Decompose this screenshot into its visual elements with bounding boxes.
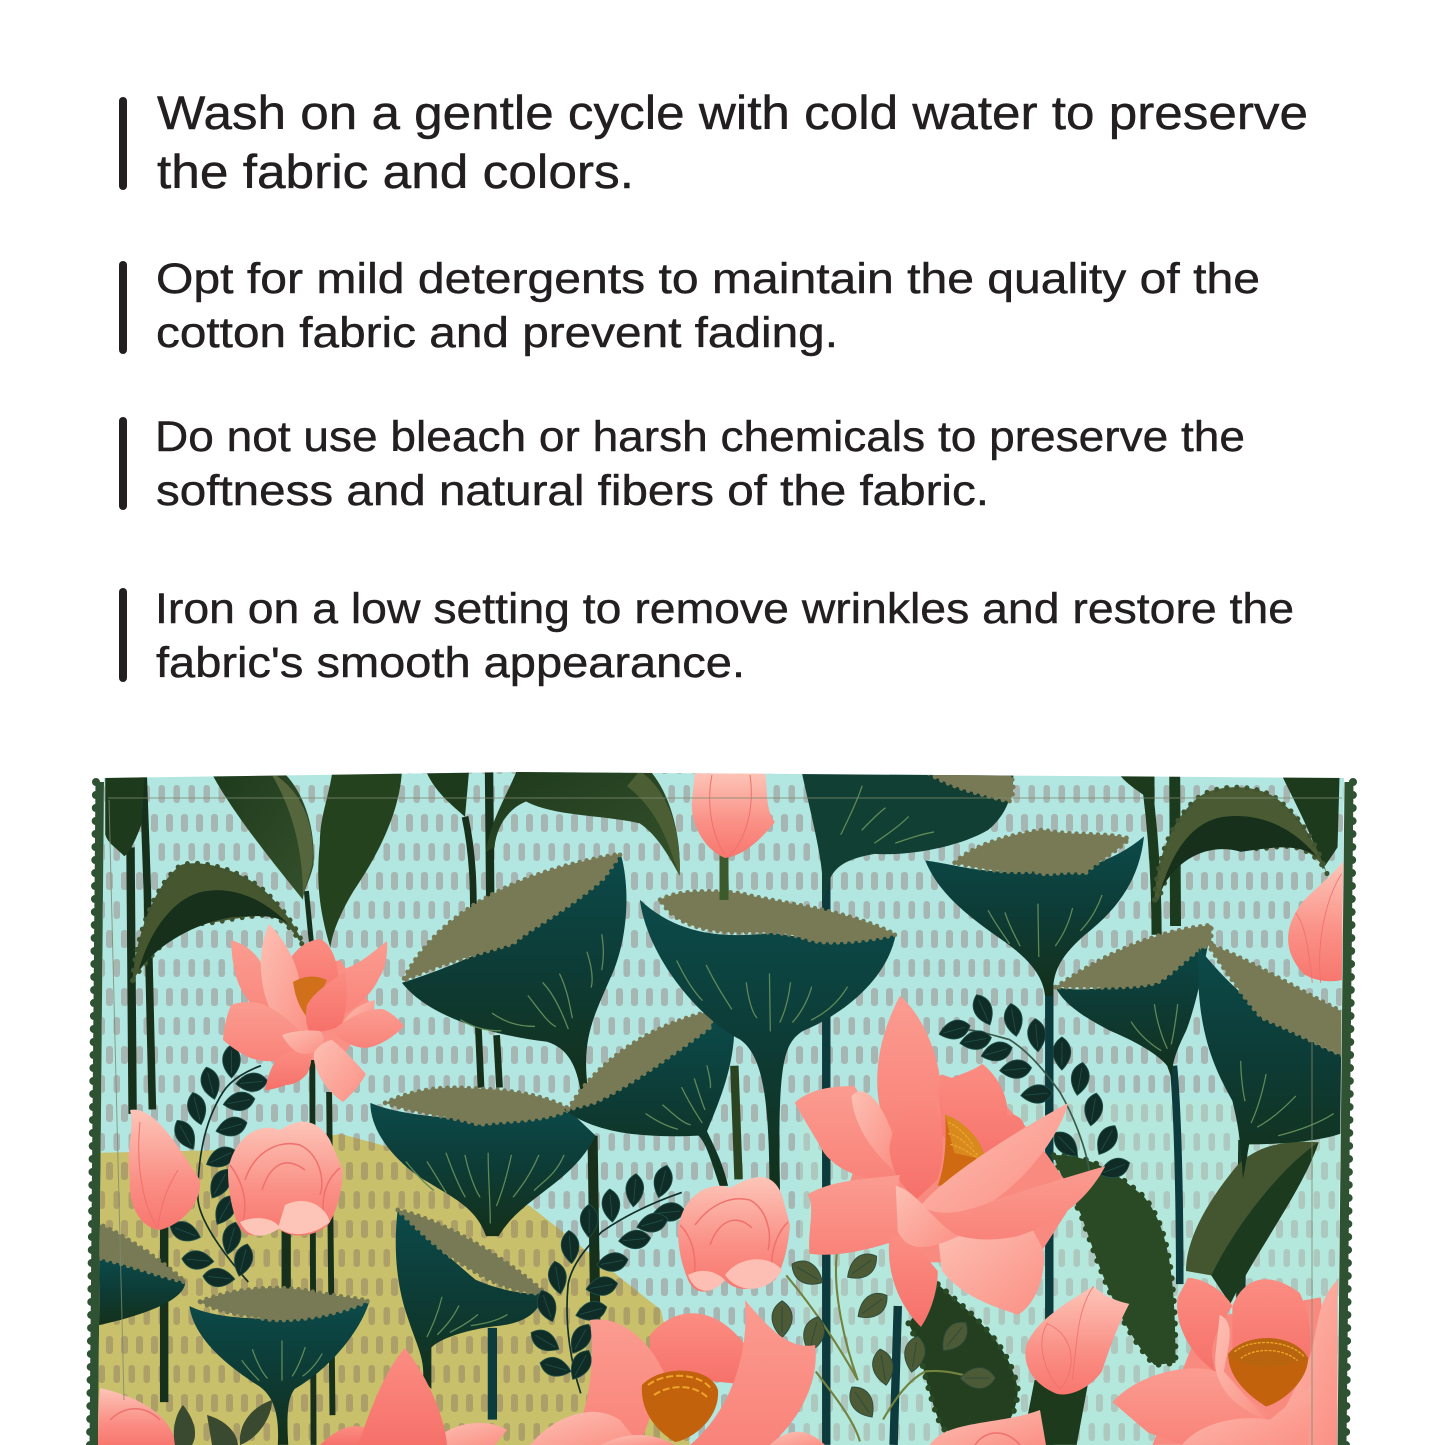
lotus pad G <box>370 1088 595 1236</box>
stitch lines <box>108 798 1342 1445</box>
sprig centre <box>527 1163 686 1393</box>
small leaves bottom <box>174 1400 272 1445</box>
bud far left <box>129 1110 200 1230</box>
bud left <box>228 1122 343 1236</box>
tip 4: iron: Iron on a low setting to remove wrinkles and restore the <box>155 585 1294 633</box>
lotus pad I <box>396 1210 545 1389</box>
tip 3: bleach: Do not use bleach or harsh chemicals to preserve the <box>155 413 1245 461</box>
green lace trim <box>90 782 1353 1445</box>
lotus pad H <box>564 1011 734 1186</box>
stems right <box>774 769 1243 1445</box>
big centre lotus <box>795 996 1105 1327</box>
tip 2: detergent: Opt for mild detergents to maintain the quality of the <box>156 255 1260 303</box>
olive sprig low <box>772 1248 995 1441</box>
open lotus upper left <box>223 924 404 1102</box>
top right edge bud <box>1288 863 1346 983</box>
lotus pad D <box>925 830 1144 996</box>
tip 1: wash: the fabric and colors. <box>157 145 634 198</box>
top right leaves <box>1117 771 1340 900</box>
sprig left <box>167 1045 268 1288</box>
orange centre <box>293 976 327 1016</box>
lower bud right <box>1025 1286 1129 1394</box>
lower right lotus <box>1112 1278 1338 1445</box>
bottom left bud <box>96 1388 176 1445</box>
sprig right <box>937 991 1133 1183</box>
printed cloth <box>80 769 1360 1445</box>
tip 1: wash <box>119 86 1308 198</box>
lotus pad K <box>97 1223 185 1326</box>
top centre bud <box>692 772 775 900</box>
orange centre <box>1228 1338 1308 1406</box>
lotus pad B <box>640 891 896 1197</box>
tip 3: bleach: softness and natural fibers of the fabric. <box>156 467 989 515</box>
tip 4: iron <box>119 585 1294 687</box>
tip 2: detergent: cotton fabric and prevent fading. <box>156 309 838 357</box>
top left leaves <box>105 771 402 981</box>
lotus pad E <box>1056 925 1211 1083</box>
bottom centre lotus <box>530 1300 825 1445</box>
lotus pad C <box>801 769 1014 904</box>
right half of the illustration <box>640 769 1346 1445</box>
stems left <box>130 769 739 1445</box>
tip 1: wash: Wash on a gentle cycle with cold water to preserve <box>157 86 1308 139</box>
sky background with dashes <box>80 770 1360 1445</box>
tip 2: detergent <box>119 255 1260 357</box>
bottom bud centre right <box>930 1410 1046 1445</box>
lower right leaves <box>908 1142 1319 1445</box>
orange centre <box>938 1115 985 1186</box>
lotus pad F <box>1198 943 1346 1179</box>
left half of the illustration <box>97 769 739 1445</box>
fabric: lotus print cloth <box>80 769 1360 1445</box>
orange centre <box>642 1371 718 1442</box>
lotus pad J <box>189 1288 370 1445</box>
olive hill with dashes <box>80 1134 690 1445</box>
lotus pad A <box>402 854 626 1092</box>
tip 3: bleach <box>119 413 1245 515</box>
top centre leaves <box>425 769 680 876</box>
bottom lotus left <box>320 1348 507 1445</box>
bud centre <box>678 1177 790 1292</box>
tip 4: iron: fabric's smooth appearance. <box>156 639 745 687</box>
